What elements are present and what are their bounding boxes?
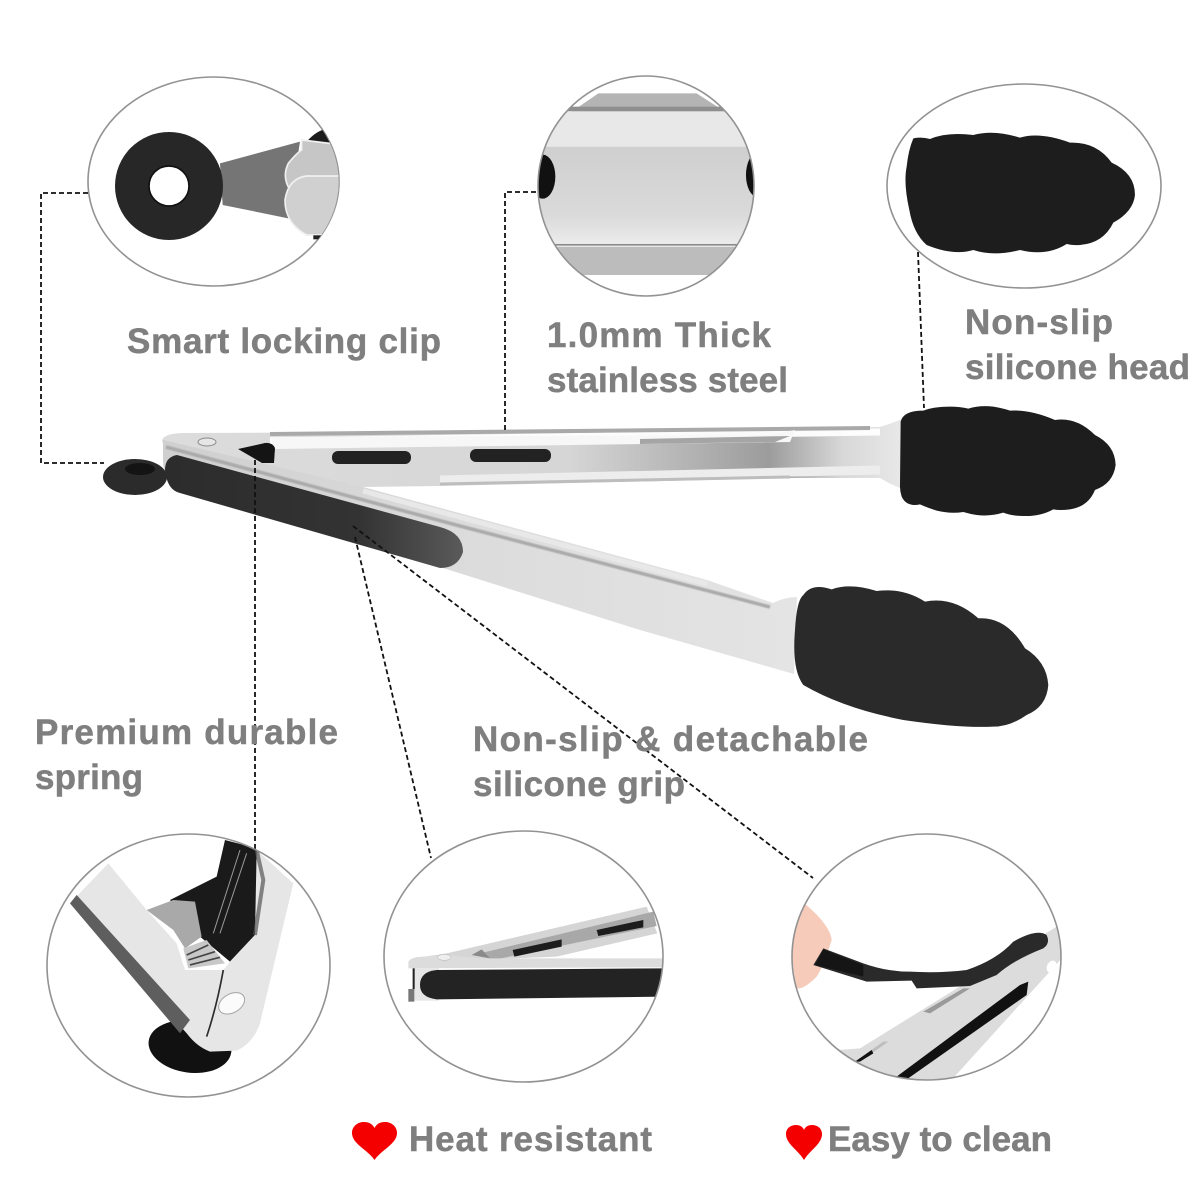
locking ring — [103, 459, 167, 495]
label: easy to clean: Easy to clean — [828, 1120, 1052, 1159]
icon: heart easy to clean — [786, 1125, 822, 1160]
heading: stainless steel thickness: 1.0mm Thick — [547, 316, 772, 355]
heading: silicone head — [965, 303, 1190, 387]
label: heat resistant: Heat resistant — [409, 1120, 652, 1159]
dashed leader: head — [918, 252, 924, 408]
dashed leader: locking clip — [41, 193, 104, 463]
upper silicone head — [900, 406, 1116, 516]
detail circle: easy to clean — [791, 834, 1067, 1082]
detail circle: smart locking clip — [88, 77, 343, 286]
detail circle: spring — [47, 834, 330, 1097]
detail circle: silicone grip close-up — [384, 831, 663, 1082]
dashed leader: easy to clean — [353, 526, 813, 878]
heading: stainless steel thickness: stainless steel — [547, 361, 788, 400]
heading: silicone grip: silicone grip — [473, 765, 685, 804]
dashed leader: spring — [254, 460, 256, 850]
slot 1 — [332, 451, 411, 464]
heading: silicone head: silicone head — [965, 348, 1190, 387]
detail circle: stainless steel — [530, 76, 769, 296]
rivet — [198, 438, 216, 446]
heading: stainless steel thickness — [547, 316, 788, 400]
icon: heart heat resistant — [352, 1122, 397, 1160]
silicone grip — [165, 455, 463, 568]
dashed leader: heat resistant — [355, 537, 431, 858]
upper arm — [162, 419, 902, 489]
lower arm — [163, 440, 797, 674]
dashed leader: steel — [505, 192, 538, 430]
heading: durable spring — [35, 713, 338, 797]
main product: tongs — [103, 406, 1116, 727]
detail circle: silicone head — [887, 84, 1161, 288]
lower silicone head — [794, 586, 1048, 727]
slot 2 — [470, 449, 551, 462]
heading: silicone head: Non-slip — [965, 303, 1113, 342]
heading: durable spring: spring — [35, 758, 143, 797]
heading: silicone grip — [473, 720, 868, 804]
heading: durable spring: Premium durable — [35, 713, 338, 752]
spring notch — [238, 443, 275, 463]
heading: silicone grip: Non-slip & detachable — [473, 720, 868, 759]
heading: smart locking clip: Smart locking clip — [127, 322, 441, 361]
